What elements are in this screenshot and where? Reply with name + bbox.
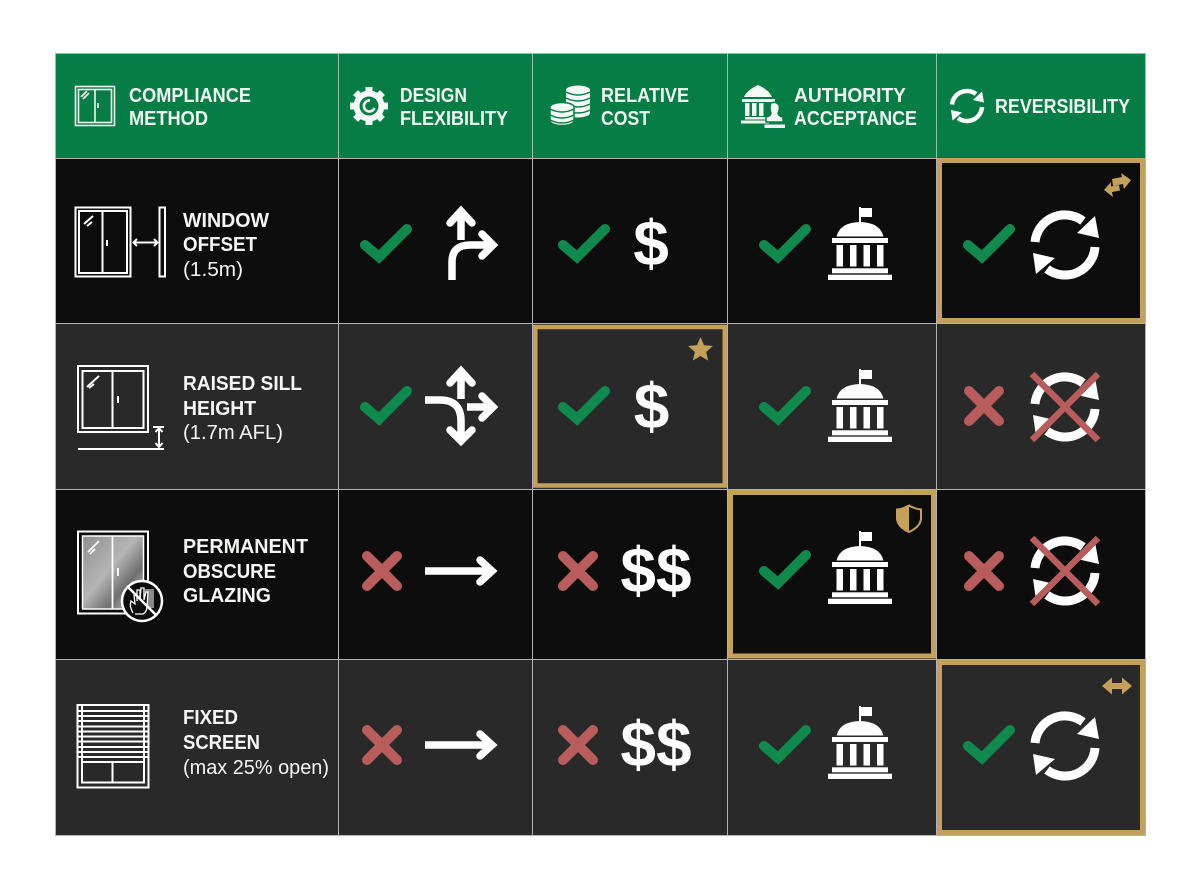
heading: compliance method: COMPLIANCE — [129, 85, 251, 107]
label: window offset: WINDOW — [183, 209, 270, 232]
icon: cross — [367, 730, 397, 760]
label: fixed screen: FIXED — [183, 706, 238, 729]
cell: raised sill method — [56, 324, 338, 490]
icon: check — [764, 555, 806, 583]
icon: window — [76, 86, 114, 126]
icon: coin stacks — [550, 86, 590, 126]
label: permanent obscure glazing: OBSCURE — [183, 560, 276, 583]
icon: cross — [969, 556, 999, 586]
icon: check — [365, 391, 407, 419]
cell: obscure glazing method — [56, 490, 338, 660]
icon: government building — [828, 369, 892, 442]
label: raised sill height: RAISED SILL — [183, 372, 302, 395]
cell: authority accepted — [728, 324, 936, 490]
cell: relative cost high — [532, 490, 728, 660]
cell: relative cost low highlighted — [532, 324, 728, 490]
icon: check — [968, 229, 1010, 257]
icon: gear — [350, 87, 388, 125]
icon: sync struck out — [1032, 538, 1099, 604]
icon: cross — [367, 556, 397, 586]
dollar cost: $ — [634, 370, 669, 442]
header cell: relative cost — [532, 54, 728, 158]
icon: government building — [828, 706, 892, 779]
badge: gold shield — [897, 506, 921, 532]
icon: check — [968, 730, 1010, 758]
label: window offset: (1.5m) — [183, 258, 243, 281]
dollar cost: $ — [633, 207, 669, 279]
badge: gold swap arrows — [1104, 173, 1131, 197]
icon: straight arrow — [425, 734, 492, 756]
label: window offset: OFFSET — [183, 233, 257, 256]
label: permanent obscure glazing: GLAZING — [183, 584, 271, 607]
cell: authority accepted — [728, 158, 936, 324]
heading: relative cost: RELATIVE — [601, 85, 689, 107]
label: raised sill height: (1.7m AFL) — [183, 421, 283, 444]
icon: straight arrow — [425, 560, 492, 582]
icon: window with raised sill — [78, 366, 164, 449]
icon: sync struck out — [1032, 374, 1099, 440]
icon: cross — [969, 391, 999, 421]
icon: check — [563, 391, 605, 419]
icon: check — [764, 229, 806, 257]
cell: window offset method — [56, 158, 338, 324]
heading: authority acceptance: AUTHORITY — [794, 85, 907, 107]
icon: government building — [828, 207, 892, 280]
cell: reversible highlighted — [936, 158, 1146, 324]
dollar cost: $$ — [620, 534, 692, 606]
icon: multi-direction arrow — [425, 371, 493, 441]
row: window offset — [56, 158, 1146, 324]
row: raised sill height — [56, 324, 1146, 490]
icon: government building — [828, 531, 892, 604]
icon: sync — [1033, 716, 1099, 776]
heading: reversibility: REVERSIBILITY — [995, 96, 1131, 118]
cell: authority accepted highlighted — [728, 490, 936, 660]
icon: authority building with stamp — [741, 85, 785, 128]
header cell: authority acceptance — [728, 54, 936, 158]
cell: design flexibility yes — [338, 324, 532, 490]
cell: not reversible — [936, 490, 1146, 660]
icon: cross — [563, 730, 593, 760]
badge: gold star — [688, 337, 713, 360]
cell: authority accepted — [728, 660, 936, 836]
label: fixed screen: SCREEN — [183, 731, 260, 754]
cell: reversible highlighted — [936, 660, 1146, 836]
dollar cost: $$ — [620, 708, 692, 780]
row: permanent obscure glazing — [56, 490, 1146, 660]
cell: relative cost low — [532, 158, 728, 324]
table header row — [56, 54, 1146, 158]
heading: design flexibility: DESIGN — [400, 85, 467, 107]
icon: window with louvre screen — [78, 705, 148, 788]
icon: obscured window with no-touch badge — [78, 532, 162, 621]
cell: not reversible — [936, 324, 1146, 490]
heading: compliance method: METHOD — [129, 108, 208, 130]
icon: branching arrow — [450, 211, 493, 280]
header cell: reversibility — [936, 54, 1146, 158]
icon: check — [764, 391, 806, 419]
icon: check — [365, 229, 407, 257]
header cell: design flexibility — [338, 54, 532, 158]
icon: window with offset to boundary — [76, 208, 165, 276]
heading: design flexibility: FLEXIBILITY — [400, 108, 509, 130]
cell: design flexibility no — [338, 660, 532, 836]
icon: cross — [563, 556, 593, 586]
icon: sync arrows — [951, 91, 984, 121]
label: raised sill height: HEIGHT — [183, 397, 256, 420]
cell: relative cost high — [532, 660, 728, 836]
heading: relative cost: COST — [601, 108, 650, 130]
badge: gold double arrow — [1102, 678, 1132, 694]
row: fixed screen — [56, 660, 1146, 836]
heading: authority acceptance: ACCEPTANCE — [794, 108, 917, 130]
label: permanent obscure glazing: PERMANENT — [183, 535, 308, 558]
icon: check — [563, 229, 605, 257]
label: fixed screen: (max 25% open) — [183, 756, 329, 779]
header cell: compliance method — [56, 54, 338, 158]
icon: check — [764, 730, 806, 758]
cell: design flexibility yes — [338, 158, 532, 324]
cell: fixed screen method — [56, 660, 338, 836]
cell: design flexibility no — [338, 490, 532, 660]
icon: sync — [1033, 215, 1099, 275]
